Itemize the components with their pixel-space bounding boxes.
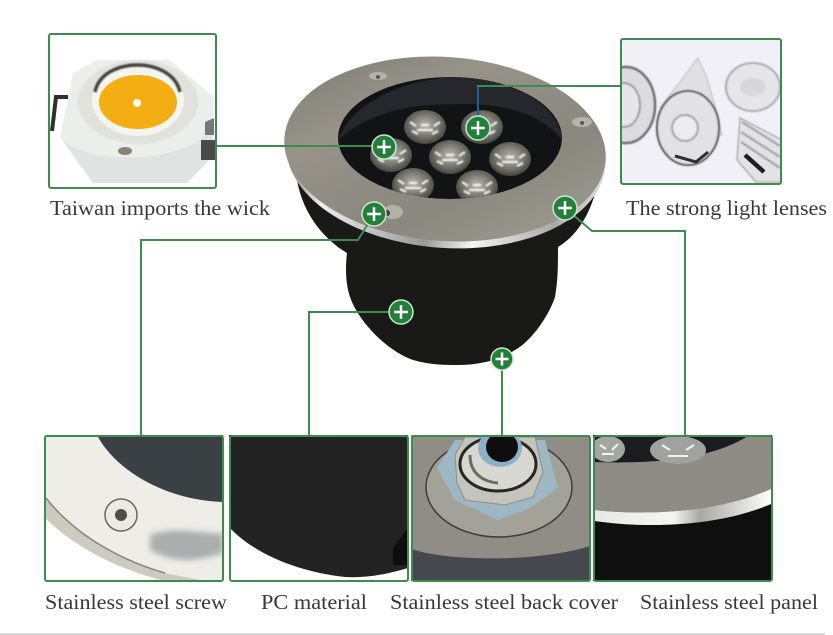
panel: lens photo	[620, 38, 782, 185]
label: wick: Taiwan imports the wick	[50, 196, 271, 220]
plus marker: lenses	[466, 116, 490, 140]
recessed lens cavity with seven lenses	[338, 77, 562, 204]
connector line: wick	[216, 145, 384, 147]
plus marker: back cover	[491, 348, 513, 370]
label: panel: Stainless steel panel	[640, 590, 818, 614]
panel: PC material photo	[229, 435, 408, 581]
label: back cover: Stainless steel back cover	[390, 590, 618, 614]
connector line: back cover	[501, 359, 503, 435]
plus marker: screw	[362, 202, 386, 226]
connector line: lenses	[477, 86, 620, 128]
black housing body	[297, 180, 598, 365]
panel: back cover photo	[411, 429, 590, 581]
label: PC material: PC material	[261, 590, 367, 614]
panel: stainless panel photo	[591, 435, 772, 581]
connector line: screw	[141, 214, 374, 435]
label: screw: Stainless steel screw	[45, 590, 228, 614]
connector line: panel	[565, 208, 685, 435]
connector line: PC material	[309, 312, 401, 435]
label: lenses: The strong light lenses	[626, 196, 827, 220]
plus marker: panel	[553, 196, 577, 220]
panel: screw photo	[44, 435, 223, 581]
plus marker: PC material	[389, 300, 413, 324]
stainless steel ring	[278, 46, 612, 259]
main product: round in-ground LED light	[278, 46, 612, 365]
plus marker: wick	[372, 135, 396, 159]
panel: wick photo	[48, 33, 216, 188]
